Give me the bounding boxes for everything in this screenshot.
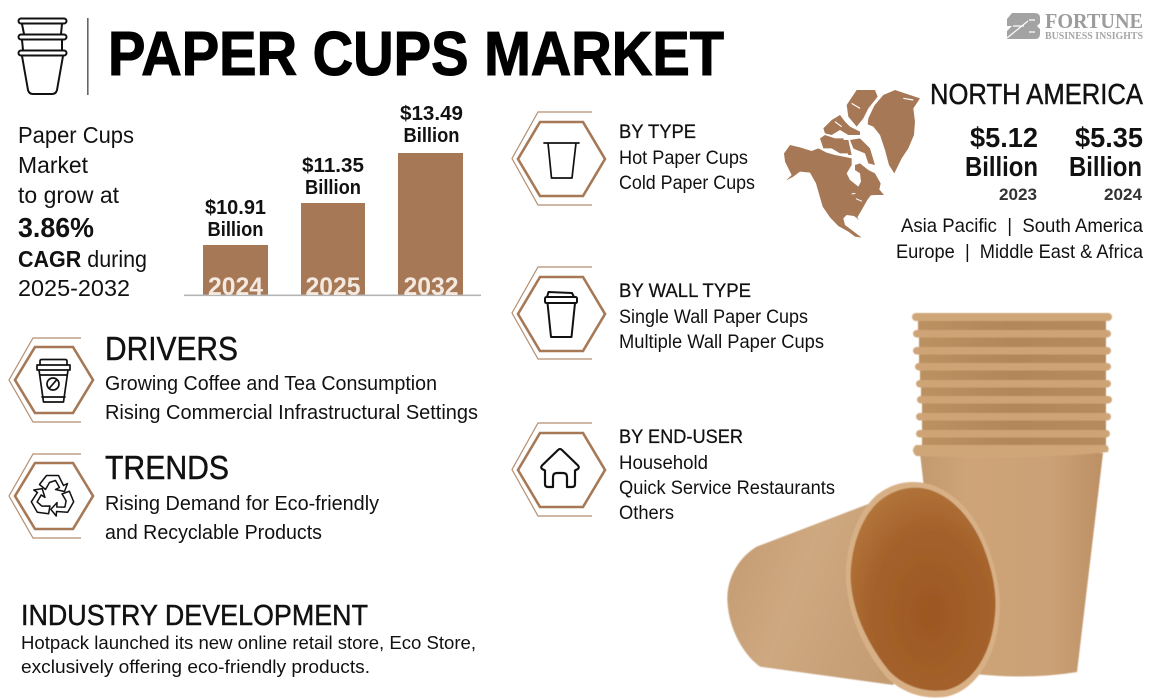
CAGR text block [18,122,147,301]
panel: by wall type: Multiple Wall Paper Cups [619,332,824,353]
panel: by end-user [512,423,835,524]
panel: by type: Hot Paper Cups [619,148,748,169]
bar chart: Billion [208,219,264,241]
tilted cup: body, rim and interior [727,482,1000,697]
bar chart: $13.49 [400,103,463,125]
CAGR text block: 2025-2032 [18,275,130,301]
panel: north america values: $5.35 [1075,122,1143,153]
panel: drivers: Growing Coffee and Tea Consumption [105,372,437,395]
title divider [87,18,89,95]
bar chart: 2032 [404,273,458,301]
upright cup body [920,453,1103,676]
bar chart: $10.91 [205,197,266,219]
panel: by end-user: BY END-USER [619,426,743,448]
panel: industry development: INDUSTRY DEVELOPMENT [21,600,368,632]
panel: by end-user: Quick Service Restaurants [619,478,835,499]
panel: north america values: 2024 [1104,185,1143,204]
panel: north america values: $5.12 [970,122,1038,153]
panel: industry development [21,600,476,677]
icon: house in hexagon [512,423,605,516]
panel: north america values: Europe | Middle East & Africa [896,241,1143,263]
panel: north america values [896,79,1144,263]
icon: recycling in hexagon [9,454,93,538]
logo: Fortune Business Insights: FORTUNE [1045,9,1143,33]
panel: drivers: Rising Commercial Infrastructural Settings [105,401,478,424]
panel: by type [512,112,755,205]
panel: industry development: exclusively offering eco-friendly products. [21,657,370,677]
logo: Fortune Business Insights [1007,9,1143,42]
icon: plain cup in hexagon [512,112,605,205]
bar chart: 2025 [306,273,361,301]
icon: stacked paper cups [18,18,66,94]
CAGR text block: Paper Cups [18,122,134,148]
panel: trends: Rising Demand for Eco-friendly [105,492,380,515]
CAGR text block: CAGR during [18,246,147,272]
stacked rims [912,313,1112,457]
panel: by wall type: BY WALL TYPE [619,280,751,302]
panel: trends: TRENDS [105,449,229,486]
bar chart: Billion [305,177,361,199]
icon: lidded cup in hexagon [512,267,605,359]
panel: trends [9,449,380,544]
panel: drivers: DRIVERS [105,330,238,367]
panel: north america values: Billion [1069,151,1142,182]
icon: coffee cup in hexagon [9,338,93,422]
logo: Fortune Business Insights: BUSINESS INSIGHTS [1045,30,1143,42]
panel: north america values: 2023 [999,185,1037,204]
bar chart: $11.35 [302,155,364,177]
panel: by wall type [512,267,824,359]
map: North America [784,90,920,238]
CAGR text block: Market [18,152,89,178]
panel: by end-user: Others [619,503,674,524]
panel: industry development: Hotpack launched its new online retail store, Eco Store, [21,633,476,653]
CAGR text block: to grow at [18,182,120,208]
panel: trends: and Recyclable Products [105,521,322,544]
panel: north america values: Asia Pacific | South America [901,215,1143,237]
panel: by type: BY TYPE [619,121,696,143]
panel: north america values: Billion [965,151,1038,182]
panel: by end-user: Household [619,453,708,474]
photo: stacked kraft paper cups [727,313,1112,697]
bar chart: Billion [404,125,460,147]
panel: by type: Cold Paper Cups [619,173,755,194]
CAGR text block: 3.86% [18,212,94,243]
title: PAPER CUPS MARKET [108,20,724,89]
bar chart [184,103,481,301]
bar chart: 2024 [208,273,263,301]
panel: by wall type: Single Wall Paper Cups [619,307,808,328]
panel: drivers [9,330,478,424]
